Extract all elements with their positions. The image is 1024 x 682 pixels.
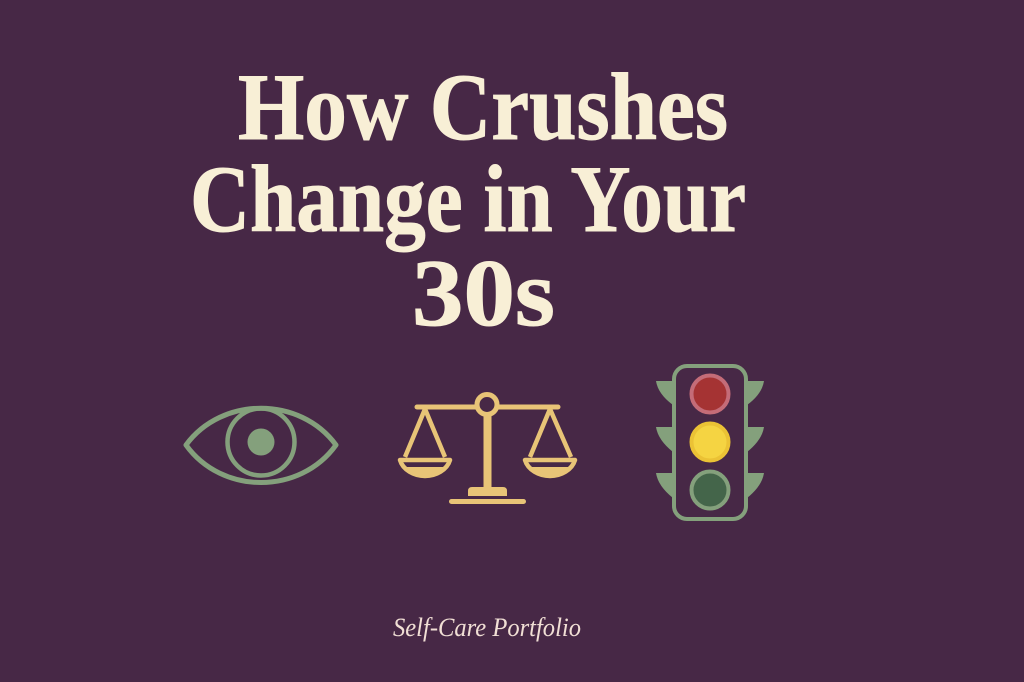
green light xyxy=(692,472,728,508)
icon: eye xyxy=(186,408,336,482)
title: How Crushes xyxy=(238,54,728,160)
title xyxy=(190,54,746,346)
left pan xyxy=(400,409,450,478)
icon: traffic light xyxy=(656,366,764,519)
red light xyxy=(692,376,728,412)
title: 30s xyxy=(412,240,555,346)
title: Change in Your xyxy=(190,146,746,252)
icon: balance scales xyxy=(400,394,575,504)
yellow light xyxy=(692,424,728,460)
right pan xyxy=(525,409,575,478)
left flaps xyxy=(656,381,673,498)
right flaps xyxy=(747,381,764,498)
footer label: Self-Care Portfolio xyxy=(393,613,581,642)
housing xyxy=(674,366,746,519)
